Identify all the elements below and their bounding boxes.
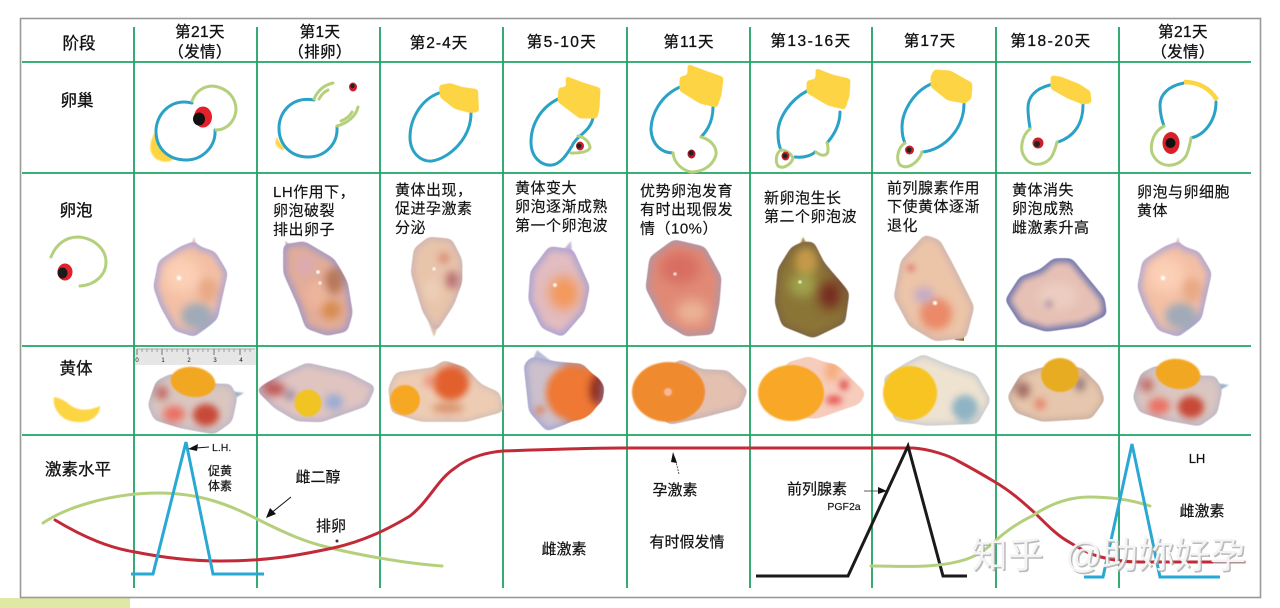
ruler: 1 bbox=[161, 358, 165, 364]
curve: LH peak bbox=[131, 442, 264, 574]
ovary day 17 bbox=[898, 71, 971, 167]
label: ovary: 卵巢 bbox=[60, 91, 94, 110]
progesterone label and arrow bbox=[652, 452, 698, 499]
curve: estrogen rising bbox=[871, 497, 1150, 566]
curve: estradiol bbox=[43, 493, 442, 566]
text day 2-4: 分泌 bbox=[395, 219, 426, 236]
ovary day 1 bbox=[275, 82, 358, 157]
photo day 1 bbox=[285, 241, 351, 334]
text day 18-20: 雌激素升高 bbox=[1012, 219, 1090, 236]
prostaglandin label and arrow: 前列腺素 bbox=[787, 481, 847, 498]
L.H. label and arrow: L.H. bbox=[212, 442, 231, 454]
LH label: LH bbox=[1189, 451, 1205, 466]
photo day 11 bbox=[647, 241, 720, 335]
follicle descriptions bbox=[273, 180, 1230, 238]
section day 13-16 bbox=[758, 356, 866, 421]
text day 1: 排出卵子 bbox=[273, 221, 335, 238]
ruler: 3 bbox=[213, 358, 217, 364]
heading: day 1: 第1天 bbox=[300, 24, 340, 41]
text day 13-16: 新卵泡生长 bbox=[764, 190, 842, 207]
text day 21: 卵泡与卵细胞 bbox=[1137, 184, 1230, 201]
section day 2-4 bbox=[389, 361, 503, 421]
prostaglandin label and arrow bbox=[787, 481, 887, 498]
text day 21: 黄体 bbox=[1137, 203, 1168, 220]
corpus luteum legend icon bbox=[54, 397, 100, 422]
photo day 17 bbox=[895, 236, 973, 341]
text day 18-20: 卵泡成熟 bbox=[1012, 201, 1074, 218]
section day 18-20 bbox=[1008, 358, 1104, 421]
heading: day 21: 第21天 bbox=[175, 24, 225, 41]
text day 11: 情（10%） bbox=[640, 220, 718, 237]
text day 1: 卵泡破裂 bbox=[273, 203, 335, 220]
heading: day 13-16: 第13-16天 bbox=[770, 32, 852, 50]
row labels bbox=[45, 34, 111, 479]
ovulation label: 排卵 bbox=[316, 518, 346, 535]
ruler: 0 bbox=[135, 358, 139, 364]
text day 5-10: 黄体变大 bbox=[515, 180, 577, 197]
watermark: 知乎 bbox=[972, 534, 1044, 576]
watermark: @助妳好孕 bbox=[1066, 534, 1246, 576]
ruler bbox=[135, 348, 256, 365]
hormone curves bbox=[43, 442, 1244, 577]
ovary day 21 repeat bbox=[1151, 82, 1217, 165]
heading: day 11: 第11天 bbox=[663, 33, 715, 51]
follicle legend icon bbox=[51, 237, 106, 286]
ovary diagrams bbox=[150, 66, 1217, 172]
text day 2-4: 促进孕激素 bbox=[395, 201, 473, 218]
ovary day 13-16 bbox=[776, 70, 849, 167]
ruler: 2 bbox=[187, 358, 191, 364]
PGF2a label: PGF2a bbox=[827, 501, 861, 513]
heading: day 21 repeat: （发情） bbox=[1151, 43, 1215, 61]
label: follicle: 卵泡 bbox=[60, 201, 92, 220]
section day 1 bbox=[258, 364, 374, 421]
corpus luteum photos row bbox=[135, 348, 1229, 433]
text day 5-10: 第一个卵泡波 bbox=[515, 216, 608, 234]
ovary photos row bbox=[155, 236, 1210, 341]
luteotropin label: 体素 bbox=[208, 479, 232, 493]
heading: day 21 repeat: 第21天 bbox=[1158, 24, 1208, 41]
hormone annotations bbox=[188, 442, 1225, 558]
section day 21 bbox=[149, 364, 244, 433]
heading: day 2-4: 第2-4天 bbox=[410, 34, 468, 52]
text day 18-20: 黄体消失 bbox=[1012, 182, 1074, 199]
text day 11: 有时出现假发 bbox=[640, 202, 733, 219]
section day 5-10 bbox=[525, 350, 603, 430]
label: corpus luteum: 黄体 bbox=[60, 359, 93, 378]
progesterone label and arrow: 孕激素 bbox=[652, 482, 698, 499]
corner colour band bbox=[0, 598, 130, 608]
text day 17: 下使黄体逐渐 bbox=[887, 199, 980, 216]
watermark: 知乎 bbox=[973, 536, 1045, 577]
text day 13-16: 第二个卵泡波 bbox=[764, 208, 857, 226]
text day 17: 前列腺素作用 bbox=[887, 180, 980, 197]
curve: PGF2a bbox=[756, 446, 967, 576]
ovary day 21 bbox=[150, 86, 236, 162]
heading: day 17: 第17天 bbox=[904, 32, 956, 50]
photo day 21 repeat bbox=[1139, 237, 1210, 335]
ovary day 5-10 bbox=[531, 78, 599, 165]
L.H. label and arrow bbox=[188, 442, 231, 454]
section day 11 bbox=[632, 360, 747, 424]
ovary day 18-20 bbox=[1022, 77, 1090, 164]
photo day 18-20 bbox=[1007, 260, 1105, 330]
heading: day 21: （发情） bbox=[168, 43, 232, 61]
estradiol label and arrow: 雌二醇 bbox=[295, 469, 341, 486]
estrogen label right: 雌激素 bbox=[1179, 503, 1225, 520]
luteotropin label: 促黄 bbox=[208, 464, 232, 478]
false estrus label: 有时假发情 bbox=[649, 534, 725, 551]
estrogen label: 雌激素 bbox=[541, 541, 587, 558]
photo day 13-16 bbox=[776, 237, 848, 337]
text day 11: 优势卵泡发育 bbox=[640, 183, 733, 200]
ovulation mark bbox=[336, 540, 338, 542]
section day 17 bbox=[883, 355, 990, 425]
text day 17: 退化 bbox=[887, 217, 918, 234]
photo day 2-4 bbox=[412, 238, 461, 337]
watermark bbox=[972, 534, 1248, 577]
text day 5-10: 卵泡逐渐成熟 bbox=[515, 199, 608, 216]
section day 21 repeat bbox=[1134, 356, 1229, 425]
heading: day 5-10: 第5-10天 bbox=[527, 33, 597, 51]
estradiol label and arrow bbox=[266, 469, 341, 518]
heading: day 1: （排卵） bbox=[288, 43, 352, 61]
watermark: @助妳好孕 bbox=[1067, 536, 1248, 577]
label: hormone level: 激素水平 bbox=[45, 460, 111, 479]
text day 2-4: 黄体出现， bbox=[395, 182, 473, 199]
ruler: 4 bbox=[239, 358, 243, 364]
text day 1: LH作用下， bbox=[273, 184, 355, 201]
ovary day 2-4 bbox=[410, 84, 478, 161]
curve: progesterone bbox=[55, 448, 1244, 562]
ovary day 11 bbox=[651, 66, 722, 172]
column headings bbox=[168, 23, 1215, 61]
heading: day 18-20: 第18-20天 bbox=[1010, 32, 1092, 50]
photo day 5-10 bbox=[530, 241, 588, 335]
label: stage: 阶段 bbox=[62, 34, 96, 53]
curve: LH second peak bbox=[1084, 444, 1220, 577]
photo day 21 bbox=[155, 237, 226, 335]
